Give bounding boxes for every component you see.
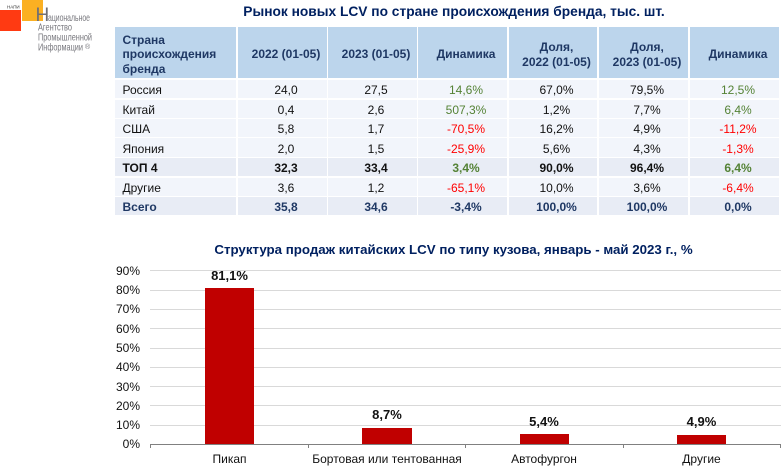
row: Всего: 100,0% — [536, 200, 577, 214]
header row: Доля, — [630, 40, 664, 54]
header row: Страна — [122, 33, 165, 47]
logo: ® — [85, 43, 91, 51]
row: Всего: 34,6 — [364, 200, 388, 214]
row: ТОП 4: 6,4% — [724, 161, 752, 175]
bar chart: body type structure — [116, 264, 781, 466]
header row: 2023 (01-05) — [342, 47, 410, 61]
row: Китай: 507,3% — [446, 103, 486, 117]
row: США — [115, 119, 779, 137]
header row: Доля, — [540, 40, 573, 54]
category labels: Бортовая или тентованная — [312, 452, 462, 466]
row: Китай: 7,7% — [633, 103, 661, 117]
y axis labels: 80% — [116, 283, 140, 297]
header row: 2022 (01-05) — [252, 47, 320, 61]
header row: 2023 (01-05) — [613, 54, 681, 68]
row: Другие — [115, 178, 779, 196]
row: Япония — [115, 138, 779, 157]
logo: Н — [36, 5, 49, 26]
row: Китай: 0,4 — [278, 103, 294, 117]
row: Россия: 12,5% — [721, 83, 755, 97]
category labels: Другие — [682, 452, 721, 466]
row: Япония: -25,9% — [447, 142, 485, 156]
row: ТОП 4: ТОП 4 — [122, 161, 158, 175]
row: Другие: 3,6 — [278, 181, 294, 195]
value labels: 4,9% — [687, 414, 717, 429]
row: Другие: -65,1% — [447, 181, 485, 195]
row: Китай — [115, 100, 779, 118]
row: Китай: 6,4% — [724, 103, 752, 117]
header row: Динамика — [709, 47, 767, 61]
row: США: -11,2% — [719, 122, 757, 136]
logo — [0, 0, 92, 54]
row: Россия: 27,5 — [364, 83, 388, 97]
row: Япония: Япония — [122, 142, 164, 156]
row: ТОП 4: 33,4 — [364, 161, 388, 175]
value labels: 81,1% — [211, 268, 248, 283]
row: Россия: 79,5% — [630, 83, 664, 97]
row: ТОП 4 — [115, 158, 779, 176]
row: США: 5,8 — [278, 122, 294, 136]
category labels: Автофургон — [511, 452, 577, 466]
row: Япония: -1,3% — [722, 142, 754, 156]
y axis labels: 60% — [116, 322, 140, 336]
row: ТОП 4: 90,0% — [539, 161, 574, 175]
row: Россия: 14,6% — [449, 83, 483, 97]
row: Россия — [115, 80, 779, 98]
y axis labels: 20% — [116, 399, 140, 413]
row: Всего: Всего — [122, 200, 157, 214]
header row: бренда — [122, 62, 165, 76]
row: Всего — [115, 197, 779, 215]
row: Китай: 2,6 — [368, 103, 384, 117]
row: Другие: 10,0% — [539, 181, 574, 195]
header row: происхождения — [122, 47, 216, 61]
row: Япония: 5,6% — [543, 142, 570, 156]
y axis labels: 30% — [116, 380, 140, 394]
header row: Динамика — [437, 47, 495, 61]
y axis labels: 40% — [116, 360, 140, 374]
row: США: 4,9% — [633, 122, 661, 136]
y axis labels — [116, 264, 140, 451]
value labels — [211, 268, 717, 429]
header row — [115, 27, 779, 78]
value labels: 5,4% — [529, 414, 559, 429]
row: Россия: Россия — [122, 83, 162, 97]
row: Япония: 1,5 — [368, 142, 384, 156]
title: chart: Структура продаж китайских LCV по типу кузова, январь - май 2023 г., % — [214, 242, 693, 257]
row: ТОП 4: 3,4% — [452, 161, 480, 175]
row: Другие: Другие — [122, 181, 161, 195]
y axis labels: 90% — [116, 264, 140, 278]
row: Япония: 2,0 — [278, 142, 294, 156]
row: США: -70,5% — [447, 122, 485, 136]
row: Всего: 0,0% — [724, 200, 752, 214]
row: Россия: 24,0 — [274, 83, 298, 97]
value labels: 8,7% — [372, 407, 402, 422]
title: table: Рынок новых LCV по стране происхождения бренда, тыс. шт. — [243, 4, 665, 19]
row: Другие: 3,6% — [633, 181, 661, 195]
bars — [205, 288, 726, 444]
row: Всего: 35,8 — [274, 200, 298, 214]
row: США: 1,7 — [368, 122, 384, 136]
row: ТОП 4: 32,3 — [274, 161, 298, 175]
row: ТОП 4: 96,4% — [630, 161, 664, 175]
category labels: Пикап — [212, 452, 247, 466]
row: Китай: Китай — [122, 103, 155, 117]
row: Всего: -3,4% — [450, 200, 482, 214]
row: США: 16,2% — [539, 122, 574, 136]
x axis — [150, 444, 781, 448]
logo: Агентство — [38, 22, 72, 34]
row: Япония: 4,3% — [633, 142, 661, 156]
row: Другие: 1,2 — [368, 181, 384, 195]
logo: НАПИ — [7, 4, 20, 10]
row: США: США — [122, 122, 150, 136]
header row: 2022 (01-05) — [522, 54, 591, 68]
y axis labels: 70% — [116, 302, 140, 316]
row: Другие: -6,4% — [722, 181, 754, 195]
row: Россия: 67,0% — [539, 83, 574, 97]
y axis labels: 50% — [116, 341, 140, 355]
row: Китай: 1,2% — [543, 103, 570, 117]
table: market by brand origin — [115, 27, 779, 215]
category labels — [212, 452, 721, 466]
y axis labels: 0% — [123, 437, 140, 451]
row: Всего: 100,0% — [627, 200, 667, 214]
y axis labels: 10% — [116, 418, 140, 432]
